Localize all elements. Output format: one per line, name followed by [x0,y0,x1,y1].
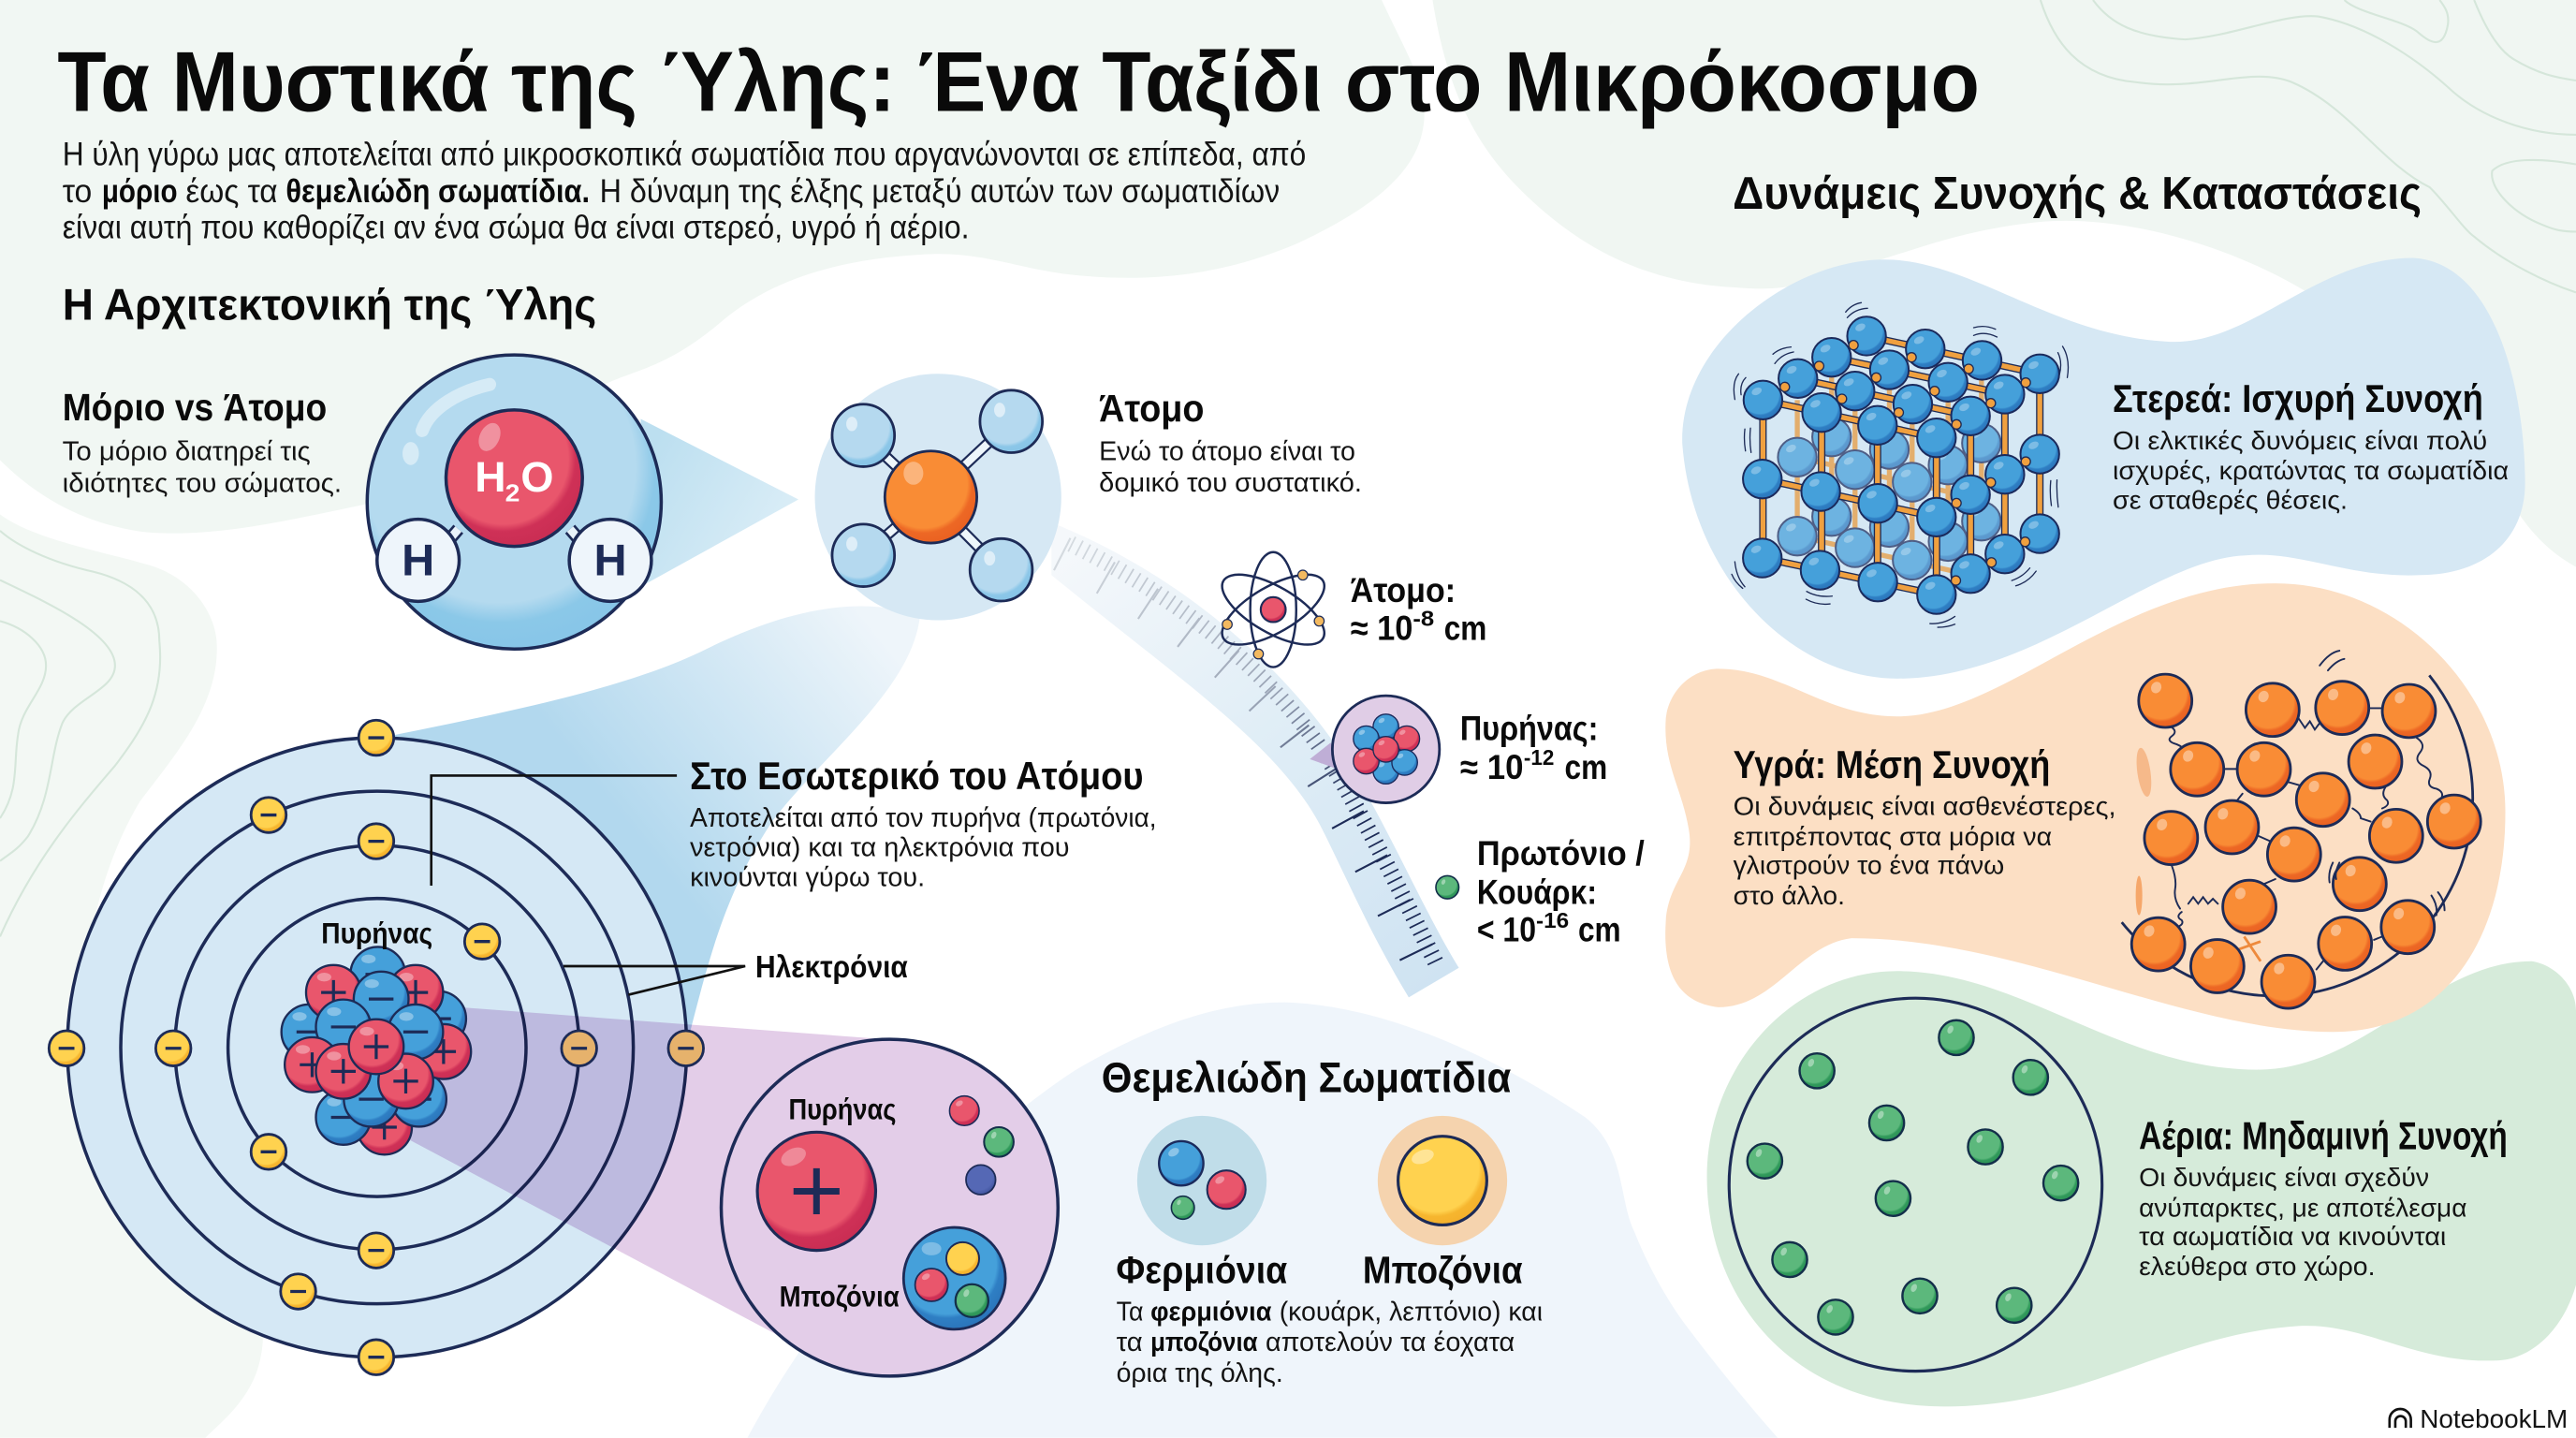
text block: fundamental particles [1117,1297,1543,1388]
text block: inside the atom: νετρόνια) και τα ηλεκτρόνια που [690,832,1070,862]
label: H right: H [593,536,627,585]
text: gases: ελεύθερα στο χώρο. [2139,1252,2376,1281]
intro paragraph: έως τα [185,173,278,210]
label: bosons: Μποζόνια [780,1279,900,1313]
icon: liquid container [2122,651,2481,1008]
scale label: proton quark [1477,834,1645,949]
contour lines [0,0,2576,936]
icon: fermions [1137,1116,1266,1245]
scale label: atom: -8 [1412,607,1434,631]
joints [1780,341,2030,585]
text block: atom: Ενώ το άτομο είναι το [1099,436,1355,466]
scale label: nucleus: ≈ 10 [1460,748,1524,786]
scale label: nucleus: cm [1565,748,1607,786]
callout triangle: molecule to atom [640,419,798,587]
panel: nucleus zoom circle [721,1039,1058,1376]
scale label: nucleus: -12 [1524,745,1554,770]
text block: inside the atom: Αποτελείται από τον πυρήνα (πρωτόνια, [690,803,1157,833]
label: nucleus in atom: Πυρήνας [321,916,432,949]
scale label: proton quark: cm [1578,911,1621,949]
background blob: top left [0,0,1425,534]
leader line: inside the atom [432,775,677,886]
text: gases: τα αωματίδια να κινούνται [2139,1222,2446,1251]
bonds [1763,336,2040,594]
inner faded atoms [1778,358,2001,580]
icon: gas container [1729,998,2102,1372]
label: H2O: 2 [505,478,520,506]
text: gases [2139,1114,2508,1281]
leader line: electrons [564,966,745,995]
weak bonds [2170,708,2442,970]
electrons under the wedge [562,1031,704,1066]
text block: molecule vs atom: Μόριο vs Άτομο [63,386,327,429]
text: solids [2113,376,2509,515]
text block: atom: Άτομο [1099,387,1204,430]
panel: gases [1707,961,2576,1406]
text block: fundamental particles: όρια της όλης. [1117,1358,1283,1388]
intro paragraph: θεμελιώδη σωματίδια. [285,173,590,210]
callout wedge: nucleus zoom [404,1007,886,1339]
text: gases: Οι δυνάμεις είναι σχεδύν [2139,1163,2429,1192]
intro paragraph: Η δύναμη της έλξης μεταξύ αυτών των σωματιδίων [600,173,1280,210]
label: nucleus: Πυρήνας [788,1093,896,1126]
icon: proton plus [757,1132,875,1251]
heading: architecture of matter: Η Αρχιτεκτονική της Ύλης [63,281,596,330]
label: H2O [475,453,553,506]
vibration marks [1732,302,2068,627]
scale label: atom: Άτομο: [1351,571,1456,609]
scale label: proton quark: Πρωτόνιο / [1477,834,1645,873]
background blob: top right [1432,0,2576,567]
text: solids: Οι ελκτικές δυνόμεις είναι πολύ [2113,426,2487,455]
scale label: nucleus [1460,709,1607,786]
title: Τα Μυστικά της Ύλης: Ένα Ταξίδι στο Μικρόκοσμο [57,34,1980,129]
intro paragraph: μόριο [102,173,178,210]
scale label: atom: ≈ 10 [1351,609,1412,647]
label: H2O: H [475,453,506,501]
scale label: proton quark: < 10 [1477,911,1536,949]
icon: crystal lattice [1732,302,2068,627]
text: liquids [1734,742,2116,910]
scale label: atom [1351,571,1486,647]
icon: nucleus magnifier [1310,696,1440,803]
text: liquids: γλιστρούν το ένα πάνω [1734,851,2004,880]
text: solids: σε σταθερές θέσεις. [2113,486,2348,515]
atoms [1847,316,1886,356]
logo: NotebookLM: NotebookLM [2420,1404,2568,1433]
panel: liquids [1665,583,2506,1032]
background blob: lower left [0,514,263,1438]
diagram: atom orbits [49,720,687,1374]
text block: atom [1099,387,1362,498]
text: liquids: Οι δυνάμεις είναι ασθενέστερες, [1734,792,2116,821]
heading: fundamental particles: Θεμελιώδη Σωματίδια [1102,1053,1511,1101]
label: H2O: O [520,453,553,501]
intro paragraph [63,136,1306,245]
electrons [49,720,500,1374]
text: liquids: Υγρά: Μέση Συνοχή [1734,742,2050,786]
scale label: proton quark: -16 [1536,908,1569,932]
label: electrons: Ηλεκτρόνια [755,950,908,985]
label: bosons: Μποζόνια [1363,1249,1523,1292]
text block: molecule vs atom [63,386,342,499]
text block: molecule vs atom: ιδιότητες του σώματος. [63,469,342,499]
text block: inside the atom [690,754,1157,893]
text block: fundamental particles: (κουάρκ, λεπτόνιο) και [1280,1297,1543,1327]
text block: inside the atom: Στο Εσωτερικό του Ατόμου [690,754,1144,798]
text block: fundamental particles: φερμιόνια [1150,1297,1272,1327]
ruler: size scale [1051,522,1459,997]
heading: cohesion forces and states: Δυνάμεις Συνοχής & Καταστάσεις [1733,169,2422,219]
text block: inside the atom: κινούνται γύρω του. [690,863,925,893]
text block: atom: δομικό του συστατικό. [1099,468,1362,498]
scale label: proton quark: Κουάρκ: [1477,873,1597,911]
label: fermions: Φερμιόνια [1116,1249,1287,1292]
icon: proton dot [1436,875,1459,899]
text block: fundamental particles: τα [1117,1328,1143,1357]
text: solids: Στερεά: Ισχυρή Συνοχή [2113,376,2483,420]
icon: water molecule [367,355,661,649]
text block: fundamental particles: Τα [1117,1297,1144,1327]
text: liquids: στο άλλο. [1734,881,1845,910]
panel background: fundamental particles [748,1003,1778,1438]
text: liquids: επιτρέποντας στα μόρια να [1734,822,2052,851]
text block: fundamental particles: αποτελούν τα έοχατα [1266,1328,1515,1357]
panel: solids [1682,258,2525,679]
text: gases: ανύπαρκτες, με αποτέλεσμα [2139,1193,2466,1222]
label: H left: H [402,536,434,585]
intro paragraph: το [63,173,92,210]
icon: bosons [1378,1116,1507,1245]
icon: boson cluster [903,1227,1005,1329]
scale label: nucleus: Πυρήνας: [1460,709,1598,747]
icon: atom molecule ball and stick [815,374,1061,621]
text block: molecule vs atom: Το μόριο διατηρεί τις [63,436,311,466]
text block: fundamental particles: μποζόνια [1150,1328,1258,1357]
scale label: atom: cm [1444,609,1486,647]
text: solids: ισχυρές, κρατώντας τα σωματίδια [2113,456,2509,485]
callout wedge: atom zoom [381,606,920,1045]
nucleus cluster [282,946,471,1154]
intro paragraph: Η ύλη γύρω μας αποτελείται από μικροσκοπικά σωματίδια που αργανώνονται σε επίπεδα, από [63,136,1306,172]
icon: atom orbit symbol [1212,552,1335,668]
intro paragraph: είναι αυτή που καθορίζει αν ένα σώμα θα είναι στερεό, υγρό ή αέριο. [63,209,970,245]
